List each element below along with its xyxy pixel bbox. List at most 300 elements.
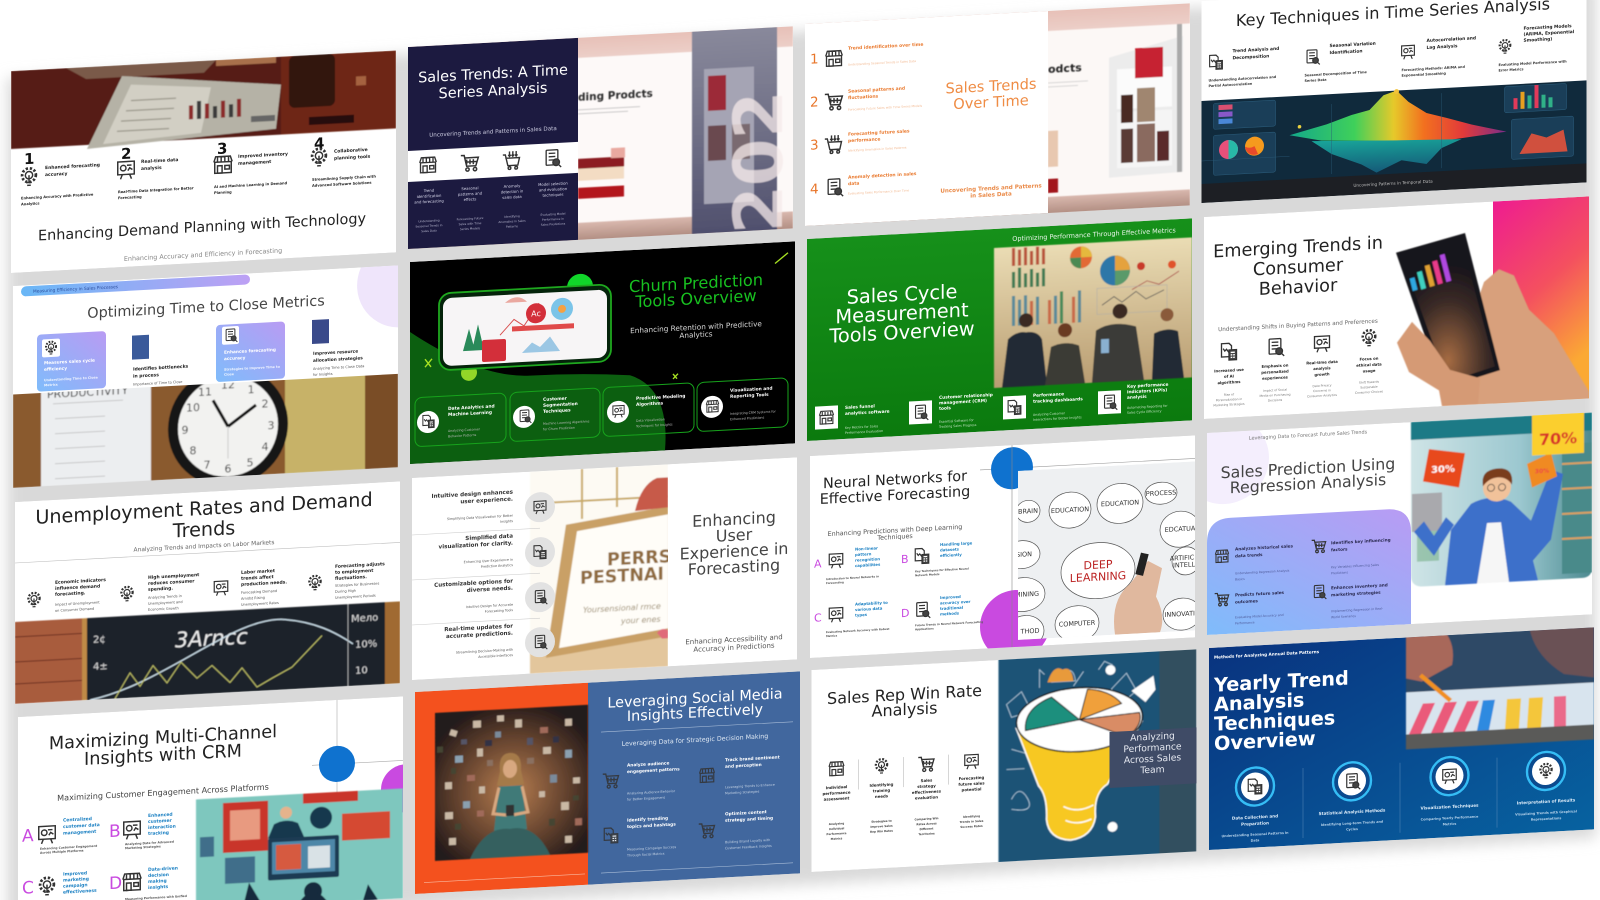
items: making	[148, 878, 167, 885]
items: Enhanced	[148, 813, 173, 819]
panel: Leveraging Social Media: Marketing Strategies	[725, 790, 760, 795]
items: Lag Analysis	[1426, 43, 1458, 51]
photo: shelf	[805, 0, 1190, 231]
item numbers: 2	[121, 145, 131, 163]
ring icons	[1236, 751, 1565, 807]
panel: Sales Cycle Measurement: Analyzing Customer	[1033, 411, 1065, 417]
panel: Key Techniques	[1202, 0, 1586, 203]
items: outcomes	[1235, 598, 1258, 605]
photo: blackboard: 2¢	[93, 634, 106, 646]
items: datasets	[940, 546, 960, 553]
items	[855, 540, 973, 621]
items	[848, 42, 923, 187]
panel: Sales Prediction	[1181, 396, 1592, 636]
panel: Emerging Trends: Decisions	[1268, 398, 1283, 403]
photo: deep learning diagram: THOD	[1020, 627, 1039, 636]
items: insights	[148, 884, 169, 891]
items: topics and hashtags	[627, 822, 676, 830]
kicker: Leveraging Data to Forecast Future Sales Trends	[1249, 429, 1368, 442]
card text: Machine Learning	[448, 410, 492, 418]
title: Optimizing Time to Close Metrics	[87, 293, 325, 322]
panel: Sales Rep Win Rate: Analyzing	[829, 821, 844, 826]
panel: Leveraging Social Media: Building Brand Loyalty with	[725, 838, 770, 844]
panel: Churn Prediction: Enhanced Predictions	[730, 416, 765, 421]
navy panel: Sales Predictions	[541, 222, 566, 227]
panel: Yearly Trend: Representations	[1531, 816, 1561, 822]
items: management (CRM)	[939, 398, 987, 406]
letters: C	[22, 878, 34, 899]
columns: patterns and	[458, 191, 483, 197]
item numbers: 4	[314, 134, 324, 153]
list items: visualization for clarity.	[439, 541, 513, 551]
list items: Customizable options for	[434, 579, 513, 589]
items: Visualization Techniques	[1420, 803, 1479, 811]
columns: Trend	[424, 188, 434, 193]
item numbers: 1	[24, 150, 34, 168]
30 percent sign: 30%	[1431, 464, 1455, 476]
panel: Churn Prediction	[410, 241, 795, 464]
panel: Emerging Trends: Sustainable	[1360, 385, 1378, 390]
items: methods	[940, 610, 960, 617]
panel: Emerging Trends: Rise of	[1224, 392, 1234, 397]
items: effectiveness	[912, 788, 942, 795]
items: During High	[335, 589, 356, 594]
panel: Sales Trends Over Time	[805, 0, 1190, 231]
panel: Sales Cycle Measurement	[807, 218, 1192, 441]
list items: Real-time updates for	[444, 624, 513, 633]
item numbers	[26, 137, 324, 164]
title: Emerging Trends in	[1213, 233, 1383, 263]
panel: Key Techniques: Evaluating Model Performance with	[1498, 59, 1567, 67]
photo: blackboard	[15, 601, 400, 704]
items: Autocorrelation and	[1426, 36, 1476, 44]
navy panel: Patterns	[506, 224, 518, 229]
panel: Enhancing Demand Planning: Real-Time Data Integration for Better	[118, 186, 194, 194]
panel: Leveraging Social Media: Customer Feedback Insights	[725, 844, 772, 850]
items: Track brand sentiment	[725, 755, 780, 763]
items: production needs.	[241, 579, 287, 588]
icons	[1215, 540, 1326, 606]
photo: clock: 4	[262, 440, 268, 454]
panel: Yearly Trend: Comparing Yearly Performance	[1421, 815, 1478, 822]
title: Leveraging Social Media	[607, 686, 783, 712]
title: Tools Overview	[634, 286, 757, 311]
icons	[829, 548, 930, 623]
plain items: Importance of Time to Close	[133, 380, 182, 387]
items: Centralized	[63, 817, 92, 824]
list items: Predictive Analytics	[481, 563, 513, 569]
30 percent sign	[1423, 447, 1465, 489]
title: Analysis	[1214, 688, 1304, 716]
photo: woman with floating photos	[435, 705, 588, 861]
photo: desk with report	[11, 50, 396, 153]
items: Predicts future sales	[1235, 590, 1284, 598]
items	[40, 811, 187, 900]
navy panel: Identifying	[504, 214, 520, 219]
panel: Sales Rep Win Rate: Success Rates	[960, 824, 983, 829]
items: effectiveness	[63, 888, 97, 896]
navy panel: Understanding	[418, 218, 440, 223]
letters: B	[109, 822, 121, 842]
subtitle: Enhancing Accuracy and Efficiency in Forecasting	[124, 246, 282, 263]
panel: Key Techniques: Exponential Smoothing	[1402, 71, 1447, 78]
items: Seasonal Variation	[1330, 42, 1376, 49]
columns: identification	[417, 193, 442, 199]
subtitle: Analytics	[679, 329, 713, 340]
items: performance	[822, 790, 851, 796]
items: indicators (KPIs)	[1127, 387, 1167, 395]
panel: Key Techniques: Seasonal Decomposition of Time	[1304, 70, 1367, 77]
item text: management	[238, 159, 272, 167]
panel: Leveraging Social Media: Measuring Campaign Success	[627, 845, 676, 852]
columns: sales data	[502, 194, 522, 200]
title: Consumer	[1253, 256, 1344, 280]
photo: deep learning diagram: EDUCATION	[1051, 505, 1089, 515]
panel: Sales Rep Win Rate: Metrics	[831, 836, 843, 841]
items: types	[855, 612, 868, 618]
items: Trend Analysis and	[1232, 47, 1279, 54]
caption: Uncovering Patterns in Temporal Data	[1353, 179, 1433, 188]
green blob	[410, 318, 666, 464]
panel: Sales Cycle Measurement: Key Metrics for Sales	[845, 424, 878, 430]
photo: screens	[196, 788, 403, 900]
title: Sales Prediction Using	[1221, 454, 1395, 482]
card text: Visualization and	[730, 387, 773, 394]
photo: excited man: 30%	[1535, 468, 1549, 475]
columns: Seasonal	[461, 185, 479, 191]
numbers: 4	[810, 181, 819, 198]
items: Unemployment and	[148, 600, 183, 606]
title: Behavior	[1259, 276, 1338, 300]
title: Sales Trends: A Time	[418, 62, 568, 86]
list items	[412, 488, 540, 662]
items: data trends	[1235, 552, 1263, 559]
plain items	[132, 317, 364, 387]
items: campaign	[63, 882, 88, 890]
caption box	[1110, 727, 1196, 788]
subtitle: Maximizing Customer Engagement Across Platforms	[57, 782, 269, 803]
panel: Neural Networks: Applications	[915, 626, 934, 631]
panel: Churn Prediction: for Churn Prediction	[543, 426, 575, 431]
items: tools	[939, 405, 951, 412]
items: algorithms	[1217, 379, 1241, 385]
panel: Emerging Trends: Consumer Choices	[1355, 389, 1383, 395]
items: customer	[148, 818, 173, 825]
caption box: Analyzing	[1130, 731, 1175, 744]
list items: Accessible Interfaces	[478, 653, 513, 659]
title: Series Analysis	[439, 81, 547, 102]
photo: deep learning diagram: PROCESS	[1146, 488, 1176, 498]
letters: A	[814, 557, 822, 571]
navy panel	[408, 38, 578, 249]
title: Measurement	[835, 298, 969, 328]
gradient card	[1207, 508, 1411, 635]
title: Sales Cycle	[847, 280, 957, 309]
panel: Churn Prediction: Techniques for Insights	[635, 422, 673, 428]
items: Unemployment Periods	[335, 594, 376, 600]
list items: diverse needs.	[467, 586, 513, 594]
icons	[825, 50, 843, 197]
items: engagement patterns	[627, 766, 680, 775]
items	[1232, 23, 1575, 61]
title: Insights Effectively	[627, 702, 764, 725]
items	[822, 775, 985, 806]
panel: Sales Rep Win Rate: Territories	[918, 831, 935, 836]
panel: Key Techniques: Partial Autocorrelation	[1208, 82, 1253, 88]
panel: Sales Rep Win Rate: Comparing Win	[914, 816, 939, 821]
gradient card: Basics	[1235, 577, 1245, 582]
items: Marketing Strategies	[125, 844, 161, 850]
items: future sales	[958, 780, 985, 787]
item text: analysis	[141, 165, 162, 172]
panel: Churn Prediction: Behavior Patterns	[448, 433, 477, 438]
items: spending.	[148, 586, 173, 593]
icons	[28, 576, 321, 607]
items: Identification	[1330, 48, 1363, 56]
panel: Sales Trends Over Time: Evaluating Sales Performance Over Time	[848, 188, 909, 196]
plain items: allocation strategies	[313, 355, 363, 364]
panel: Sales Rep Win Rate: Trends in Sales	[960, 819, 984, 824]
items: Increased use	[1214, 367, 1244, 373]
panel: Sales Rep Win Rate: Different	[919, 826, 934, 831]
items: High unemployment	[148, 573, 199, 581]
numbers: 2	[810, 94, 819, 111]
navy panel: Anomalies in Sales	[498, 219, 526, 224]
items: Statistical Analysis Methods	[1319, 808, 1386, 816]
photo: deep learning diagram: COMPUTER	[1059, 619, 1096, 629]
card text: Reporting Tools	[730, 392, 769, 400]
pill banner: Measuring Efficiency in Sales Processes	[33, 284, 119, 295]
items: Enhancing Customer Engagement	[40, 844, 97, 851]
subtitle: Leveraging Data for Strategic Decision Making	[622, 733, 768, 748]
cards: Measures sales cycle	[44, 359, 95, 366]
list items: Insights	[500, 519, 513, 524]
cards: Metrics	[44, 383, 58, 387]
panel: Leveraging Social Media: Through Social Metrics	[626, 852, 665, 858]
card text: Segmentation	[543, 401, 578, 409]
photo: clock: 7	[204, 458, 210, 472]
panel: Leveraging Social Media	[415, 671, 800, 894]
panel: Neural Networks: Future Trends in Neural Network Forecasting	[915, 620, 983, 627]
items: tracking dashboards	[1033, 396, 1083, 405]
columns	[414, 180, 568, 205]
photo: deep learning diagram: TAMINING	[1006, 590, 1039, 600]
panel: Sales Trends Over Time: Identifying Anomalies in Sales Patterns	[848, 146, 907, 153]
photo: shelf: odcts	[1048, 61, 1082, 76]
white list panel	[805, 11, 1048, 226]
icons	[603, 768, 714, 843]
gradient block	[1493, 196, 1589, 404]
items: Improved	[63, 871, 87, 878]
subtitle: Enhancing Accessibility and	[685, 633, 783, 646]
columns: Model selection	[538, 180, 568, 187]
items: Across Multiple Platforms	[40, 848, 84, 855]
items: Adaptability to	[855, 600, 888, 607]
letters: D	[109, 873, 122, 894]
items	[55, 562, 385, 612]
title: Churn Prediction	[629, 270, 763, 296]
items: Data-driven	[148, 866, 178, 873]
item text: Enhanced forecasting	[45, 163, 100, 171]
photo: clock: 2	[262, 397, 268, 411]
panel: Enhancing Demand Planning: Forecasting	[118, 195, 142, 200]
photo: clock: 3	[268, 419, 274, 432]
subtitle: Uncovering Trends and Patterns	[940, 183, 1042, 195]
right panel	[668, 457, 797, 666]
title: Yearly Trend	[1214, 667, 1349, 697]
title: Maximizing Multi-Channel	[49, 722, 277, 754]
cards: Enhances forecasting	[224, 348, 276, 356]
list items: Simplifying Data Visualization for Better	[447, 514, 513, 521]
items: Forecasting adjusts	[335, 562, 385, 570]
items: potential	[962, 786, 981, 792]
panel: Churn Prediction: Machine Learning Algorithms	[543, 419, 589, 426]
panel: Yearly Trend: Metrics	[1443, 822, 1456, 827]
items: experiences	[1262, 374, 1289, 381]
navy panel: Forecasting Future	[457, 216, 483, 221]
photo: hand with pencil and bars	[1406, 622, 1594, 749]
item text: Improved inventory	[238, 152, 288, 160]
items: efficiently	[940, 552, 962, 558]
photo: deep learning diagram: EDUCATION	[1101, 498, 1139, 508]
items: trends affect	[241, 574, 274, 582]
panel: Sales Rep Win Rate: Improve Sales	[870, 824, 893, 829]
title: Unemployment Rates and Demand	[35, 488, 373, 529]
tool cards	[415, 378, 788, 447]
items: Individual	[826, 784, 847, 790]
panel: Optimizing Time to Close	[13, 265, 398, 498]
items: data	[848, 181, 859, 187]
items: pattern	[855, 551, 872, 557]
green circles	[461, 273, 593, 381]
photo: pink room with shelf	[408, 21, 793, 254]
panel: Enhancing Demand Planning: Planning	[214, 190, 232, 195]
photo: signboard	[530, 464, 671, 674]
cards: Strategies to Improve Time to	[224, 365, 280, 372]
items: strategy and timing	[725, 815, 773, 824]
photo: clock: 10	[186, 401, 200, 415]
title: Over Time	[953, 92, 1029, 113]
panel: Sales Rep Win Rate: Rep Win Rates	[870, 829, 893, 834]
photo: blackboard: 10%	[355, 639, 377, 651]
subtitle: Techniques	[876, 532, 913, 542]
items: Improved	[940, 594, 961, 600]
items: Sales funnel	[845, 404, 875, 411]
pill banner	[21, 274, 250, 297]
items	[1235, 537, 1391, 605]
item numbers: 3	[217, 139, 227, 158]
items: interaction	[148, 824, 176, 831]
items: Unemployment Rates	[241, 601, 279, 607]
cards: accuracy	[224, 355, 246, 362]
plain items: in process	[133, 372, 159, 380]
items: Interpretation of Results	[1517, 797, 1576, 806]
list items: Enhancing User Experience in	[464, 558, 513, 564]
icons	[1222, 330, 1375, 360]
navy panel: Performance in	[542, 217, 564, 222]
items: forecasting.	[55, 590, 86, 598]
photo: excited man	[1411, 402, 1592, 587]
items: Forecasting Models	[1524, 24, 1572, 32]
panel: Enhancing User Experience	[412, 457, 797, 680]
blue circle	[319, 745, 355, 783]
list items: Forecasting Tools	[485, 608, 513, 614]
blue circle	[991, 446, 1033, 490]
plain items: Improves resource	[313, 350, 358, 357]
photo: clock: 11	[198, 385, 212, 399]
panel: Sales Rep Win Rate: Performance	[826, 831, 847, 836]
purple circle	[980, 588, 1050, 662]
panel: Sales Cycle Measurement: Essential Software for	[939, 418, 974, 424]
card text: Data Analytics and	[448, 404, 495, 412]
items: Forecasting future sales	[848, 129, 910, 138]
item text: accuracy	[45, 171, 67, 178]
items: Data Collection and	[1232, 813, 1278, 821]
items: Decomposition	[1232, 53, 1269, 61]
items: assessment	[824, 795, 850, 802]
panel: Yearly Trend: Cycles	[1346, 827, 1358, 832]
icons	[22, 148, 326, 186]
photo: deep learning diagram: DEEP	[1084, 558, 1112, 572]
panel: Enhancing Demand Planning: Advanced Software Solutions	[312, 181, 372, 188]
panel: Sales Rep Win Rate: Rates Across	[916, 821, 937, 826]
columns: and forecasting	[414, 198, 444, 205]
caption box: Across Sales	[1124, 752, 1181, 766]
items: Forecasting	[959, 775, 984, 781]
hand and phone	[1396, 226, 1589, 411]
lavender blob	[1181, 414, 1269, 506]
panel: Neural Networks: Key Techniques for Effective Neural	[915, 567, 969, 573]
photo: blackboard: Meлo	[351, 613, 378, 625]
photo: deep learning diagram: ARTIFIC	[1170, 553, 1195, 563]
gradient card: Evaluating Model Accuracy and	[1235, 613, 1284, 620]
list items: Simplified data	[465, 534, 513, 542]
caption box: Team	[1139, 764, 1165, 776]
translucent panel	[691, 27, 782, 234]
subtitle: Analyzing Trends and Impacts on Labor Markets	[134, 540, 274, 554]
dashboard image	[1202, 79, 1586, 203]
items: Economic Growth	[148, 606, 179, 612]
navy panel: Sales Data	[421, 228, 437, 233]
photo: deep learning diagram: INNOVATIC	[1164, 609, 1200, 619]
items: fluctuations.	[335, 574, 367, 582]
panel: Sales Trends Over Time: Understanding Seasonal Trends in Sales Data	[848, 59, 916, 67]
panel: Emerging Trends: Shift Towards	[1359, 380, 1379, 385]
panel: Yearly Trend: Understanding Seasonal Patterns in	[1221, 831, 1289, 838]
panel: Enhancing Demand Planning: Enhancing Accuracy with Predictive	[21, 193, 93, 200]
card text	[448, 385, 773, 420]
gradient card: World Scenarios	[1331, 614, 1356, 619]
panel: Sales Rep Win Rate: Strategies to	[871, 819, 892, 824]
gradient card: Implementing Regression in Real-	[1331, 607, 1383, 613]
gradient card: Predictions	[1331, 570, 1348, 575]
items: evaluation	[915, 794, 938, 801]
panel: Unemployment Rates	[15, 481, 400, 704]
panel: Sales Cycle Measurement: Sales Cycle Efficiency	[1127, 409, 1162, 415]
items: Strategies for Businesses	[335, 582, 379, 588]
panel: Sales Cycle Measurement: Tracking Sales Progress	[938, 423, 977, 429]
photo: deep learning diagram: SION	[1016, 550, 1032, 559]
items: customer data	[63, 822, 100, 830]
cards	[37, 321, 285, 392]
items: influence demand	[55, 583, 100, 592]
items: Analyzing Data for Advanced	[125, 840, 174, 846]
item text: Real-time data	[141, 158, 178, 165]
panel: Enhancing Demand Planning: Streamlining Supply Chain with	[312, 174, 376, 182]
items: analysis	[1127, 394, 1147, 401]
icon tiles	[815, 390, 1121, 430]
items: and perception	[725, 762, 762, 770]
